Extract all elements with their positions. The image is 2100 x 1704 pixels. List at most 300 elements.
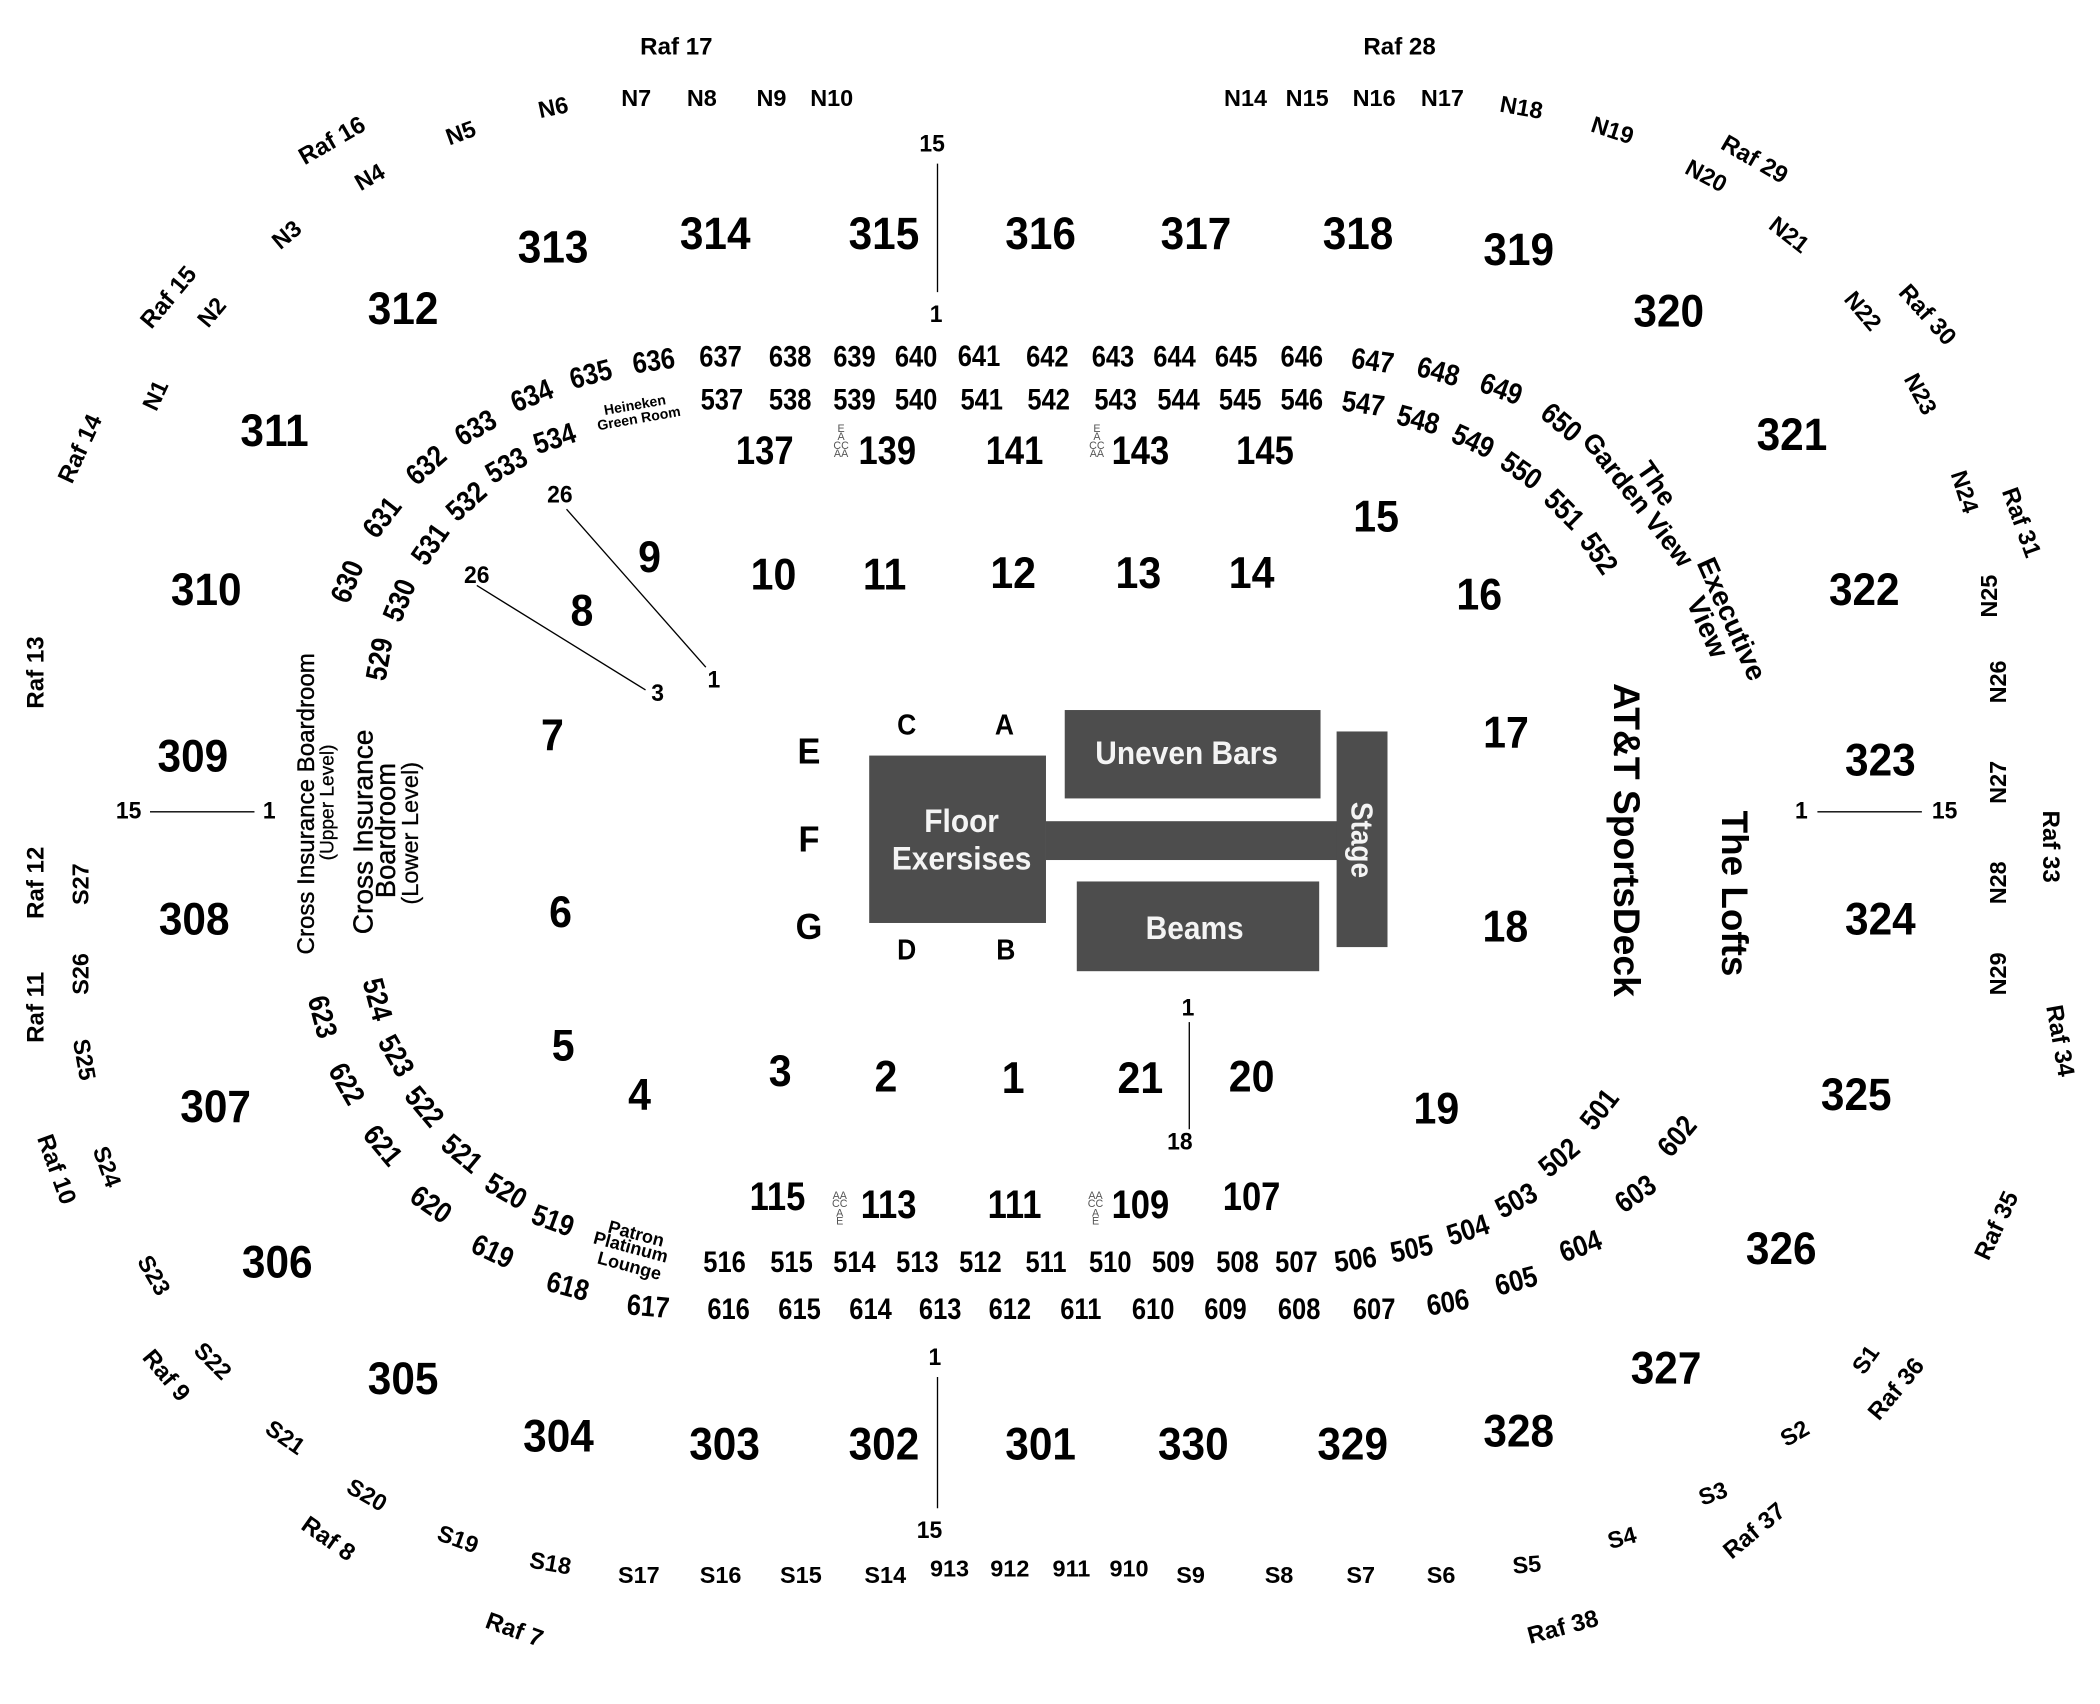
600 level top arc: 640 <box>895 340 937 373</box>
Patron Platinum Lounge label: Lounge <box>595 1248 664 1284</box>
rafter sections: Raf 36 <box>1863 1353 1930 1425</box>
north suites <box>137 85 2011 995</box>
south suites: S20 <box>342 1473 392 1517</box>
north suites: N29 <box>1985 952 2011 995</box>
north suites: N22 <box>1839 286 1887 336</box>
600 level bottom arc: 603 <box>1608 1168 1662 1219</box>
panel: stage <box>1337 731 1388 947</box>
600 level bottom arc: 615 <box>778 1292 821 1325</box>
Cross Insurance Boardroom lower level: (Lower Level) <box>397 762 423 905</box>
500 level bottom arc: 514 <box>833 1245 876 1278</box>
stage labels: Beams <box>1146 910 1244 946</box>
500 level bottom arc: 504 <box>1443 1207 1494 1252</box>
rafter sections: Raf 8 <box>296 1511 360 1567</box>
The Garden View label: The <box>1631 456 1683 512</box>
south suites: S9 <box>1176 1562 1205 1588</box>
lower bowl 100 sections: 115 <box>750 1174 805 1219</box>
floor level sections 1 to 21: 20 <box>1229 1052 1274 1102</box>
row guide numbers: 1 <box>928 1344 941 1370</box>
stage labels: Floor <box>924 803 999 839</box>
south suites <box>67 863 1884 1588</box>
600 level top arc: 643 <box>1092 340 1134 373</box>
500 level bottom arc: 520 <box>480 1166 533 1216</box>
floor section letters: G <box>796 907 822 947</box>
600 level top arc: 630 <box>324 556 370 607</box>
north suites: N18 <box>1498 91 1545 124</box>
north suites: N25 <box>1976 575 2002 618</box>
floor stage diagram <box>869 710 1388 971</box>
500 level top arc: 531 <box>404 517 456 571</box>
upper level 300 sections: 319 <box>1483 225 1554 275</box>
500 level bottom arc: 502 <box>1532 1131 1586 1184</box>
accessible seating row stacks: CC <box>833 440 849 452</box>
south suites: S25 <box>68 1037 101 1082</box>
upper level 300 sections: 312 <box>368 284 438 334</box>
lower bowl 100 sections: 141 <box>986 428 1043 473</box>
500 level top arc: 548 <box>1393 398 1443 441</box>
rafter sections: Raf 12 <box>23 847 50 919</box>
row guide numbers: 15 <box>116 797 141 824</box>
500 level top arc: 544 <box>1157 383 1200 416</box>
accessible seating row stacks: AA <box>834 448 849 460</box>
south suites: S24 <box>88 1143 126 1191</box>
accessible seating row stacks: E <box>838 423 845 435</box>
floor level sections 1 to 21: 18 <box>1483 902 1528 952</box>
600 level top arc: 632 <box>399 438 453 491</box>
panel: beams <box>1077 881 1319 971</box>
floor level sections 1 to 21: 14 <box>1229 549 1275 598</box>
600 level bottom arc: 607 <box>1353 1292 1395 1325</box>
500 level bottom arc: 513 <box>896 1245 939 1278</box>
500 level top arc: 552 <box>1573 526 1625 580</box>
500 level bottom arc <box>356 975 1625 1279</box>
stage labels: Stage <box>1344 802 1377 878</box>
500 level top arc: 539 <box>833 383 876 416</box>
600 level bottom arc: 620 <box>404 1178 458 1230</box>
accessible seating row stacks: CC <box>832 1198 848 1210</box>
upper level 300 sections: 302 <box>849 1419 919 1470</box>
upper level 300 sections: 306 <box>242 1237 313 1288</box>
rafter sections: Raf 7 <box>482 1607 547 1653</box>
500 level top arc: 542 <box>1027 383 1070 416</box>
accessible seating row stacks: E <box>1093 423 1100 435</box>
lower bowl 100 sections: 139 <box>858 428 916 473</box>
500 level bottom arc: 507 <box>1275 1245 1318 1278</box>
floor section letters: C <box>897 709 916 741</box>
south suites: S14 <box>864 1562 906 1588</box>
upper level 300 sections: 328 <box>1483 1406 1554 1457</box>
rafter sections: Raf 38 <box>1525 1605 1601 1650</box>
500 level bottom arc: 509 <box>1152 1245 1194 1278</box>
row guide numbers: 15 <box>919 130 945 157</box>
upper level 300 sections: 310 <box>171 565 242 616</box>
north suites: N4 <box>350 158 389 196</box>
floor level sections 1 to 21: 15 <box>1353 492 1399 542</box>
Cross Insurance Boardroom upper level: (Upper Level) <box>318 744 339 860</box>
north suites: N24 <box>1946 467 1984 516</box>
500 level top arc: 543 <box>1094 383 1137 416</box>
row guide numbers: 1 <box>930 300 943 327</box>
north suites: N10 <box>810 85 853 111</box>
600 level bottom arc: 621 <box>357 1118 409 1172</box>
lower bowl 100 sections: 143 <box>1112 428 1169 473</box>
row guide numbers: 1 <box>263 797 276 824</box>
north suites: N5 <box>442 115 479 150</box>
north suites: N6 <box>536 92 570 123</box>
upper level 300 sections: 308 <box>159 894 230 945</box>
floor level sections 1 to 21: 12 <box>990 549 1036 598</box>
north suites: N8 <box>687 85 717 111</box>
south suites: S6 <box>1427 1562 1455 1588</box>
north suites: N14 <box>1224 85 1267 111</box>
lower bowl 100 sections: 145 <box>1236 428 1294 473</box>
floor level sections 1 to 21: 16 <box>1456 570 1502 620</box>
600 level bottom arc: 602 <box>1650 1109 1703 1163</box>
500 level bottom arc: 501 <box>1573 1082 1625 1136</box>
floor level sections 1 to 21: 4 <box>628 1071 651 1121</box>
floor section letters: B <box>996 934 1015 966</box>
600 level top arc <box>324 339 1589 607</box>
500 level bottom arc: 524 <box>356 975 399 1025</box>
500 level top arc: 551 <box>1538 482 1591 536</box>
600 level bottom arc: 606 <box>1424 1282 1472 1322</box>
rafter sections: Raf 10 <box>31 1131 81 1208</box>
floor level sections 1 to 21: 6 <box>549 887 572 937</box>
upper level 300 sections: 305 <box>368 1354 438 1404</box>
500 level bottom arc: 503 <box>1490 1176 1543 1225</box>
south suites: S17 <box>618 1562 660 1588</box>
500 level top arc: 545 <box>1219 383 1261 416</box>
upper level 300 sections: 330 <box>1158 1419 1229 1470</box>
500 level top arc: 530 <box>376 574 422 626</box>
500 level bottom arc: 511 <box>1025 1245 1067 1278</box>
south suites: S19 <box>434 1520 482 1558</box>
rafter sections: Raf 34 <box>2040 1003 2079 1079</box>
south suites: S26 <box>67 953 93 995</box>
500 level bottom arc: 508 <box>1216 1245 1259 1278</box>
floor section letters <box>796 709 1015 966</box>
600 level top arc: 650 <box>1535 396 1589 448</box>
Executive View label: View <box>1681 592 1735 662</box>
panel: uneven bars <box>1065 710 1321 798</box>
upper level 300 sections: 316 <box>1005 209 1076 259</box>
north suites: N21 <box>1764 211 1814 258</box>
floor level sections 1 to 21: 21 <box>1118 1053 1163 1103</box>
north suites: N1 <box>137 376 173 414</box>
600 level bottom arc: 611 <box>1060 1292 1101 1325</box>
rafter sections: Raf 28 <box>1363 34 1436 61</box>
upper level 300 sections: 326 <box>1746 1224 1817 1274</box>
500 level top arc: 549 <box>1447 417 1499 465</box>
Patron Platinum Lounge label: Platinum <box>591 1228 670 1267</box>
accessible seating row stacks: AA <box>1088 1190 1104 1202</box>
north suites: N20 <box>1681 154 1731 197</box>
south suites: S2 <box>1776 1415 1814 1452</box>
row guide numbers: 15 <box>917 1516 942 1543</box>
floor level sections 1 to 21: 13 <box>1116 549 1161 598</box>
upper level 300 sections: 329 <box>1317 1419 1388 1470</box>
600 level top arc: 647 <box>1349 341 1396 380</box>
600 level bottom arc: 619 <box>467 1227 519 1275</box>
lower bowl 100 sections: 113 <box>861 1182 916 1227</box>
north suites: N17 <box>1421 85 1464 111</box>
accessible seating row stacks: A <box>836 1208 844 1220</box>
south suites: 911 <box>1053 1556 1090 1582</box>
600 level bottom arc: 617 <box>626 1288 671 1324</box>
600 level bottom arc <box>301 992 1703 1325</box>
600 level bottom arc: 608 <box>1278 1292 1320 1325</box>
south suites: S5 <box>1511 1550 1542 1579</box>
600 level top arc: 645 <box>1215 340 1257 373</box>
600 level top arc: 646 <box>1281 340 1323 373</box>
Heineken Green Room label: Heineken <box>603 391 667 418</box>
500 level top arc: 538 <box>769 383 811 416</box>
600 level top arc: 642 <box>1026 340 1069 373</box>
500 level bottom arc: 510 <box>1089 1245 1132 1278</box>
600 level bottom arc: 616 <box>707 1292 750 1325</box>
500 level bottom arc: 505 <box>1387 1228 1436 1269</box>
500 level bottom arc: 516 <box>703 1245 746 1278</box>
accessible seating row stacks <box>832 423 1105 1228</box>
row guide numbers: 3 <box>651 679 664 706</box>
600 level bottom arc: 604 <box>1555 1223 1607 1269</box>
floor level sections 1 to 21: 10 <box>751 550 796 600</box>
upper level 300 sections: 317 <box>1161 209 1231 259</box>
500 level top arc: 537 <box>701 383 743 416</box>
rafter sections: Raf 16 <box>294 111 370 171</box>
stage labels <box>892 735 1377 946</box>
south suites: S21 <box>261 1415 310 1460</box>
upper level 300 sections: 320 <box>1633 286 1704 337</box>
600 level bottom arc: 623 <box>301 992 344 1042</box>
north suites: N3 <box>267 215 306 254</box>
row guide lines <box>150 164 1922 1508</box>
floor level sections 1 to 21: 1 <box>1002 1053 1025 1103</box>
accessible seating row stacks: E <box>836 1216 843 1228</box>
lower bowl 100 sections: 109 <box>1112 1182 1169 1227</box>
north suites: N23 <box>1899 369 1942 419</box>
floor level sections 1 to 21: 9 <box>638 533 661 582</box>
south suites: S1 <box>1847 1340 1884 1379</box>
upper level 300 sections: 309 <box>158 731 228 782</box>
500 level bottom arc: 519 <box>527 1197 579 1243</box>
south suites: S16 <box>700 1562 741 1588</box>
row guide numbers: 1 <box>1795 797 1808 824</box>
Patron Platinum Lounge label: Patron <box>606 1217 666 1251</box>
lower bowl 100 sections: 137 <box>736 428 794 473</box>
500 level bottom arc: 522 <box>398 1080 451 1133</box>
upper level 300 sections: 313 <box>518 222 588 273</box>
accessible seating row stacks: CC <box>1089 440 1105 452</box>
600 level top arc: 649 <box>1476 366 1527 411</box>
The Garden View label: Garden View <box>1576 427 1700 573</box>
accessible seating row stacks: CC <box>1088 1198 1104 1210</box>
row guide numbers: 26 <box>547 481 573 508</box>
floor level sections 1 to 21: 11 <box>863 550 906 600</box>
upper level 300 sections: 324 <box>1845 894 1916 945</box>
floor section letters: E <box>797 732 820 772</box>
upper level 300 sections: 318 <box>1323 209 1393 259</box>
500 level top arc: 532 <box>439 475 493 528</box>
south suites: 913 <box>930 1556 969 1582</box>
500 level bottom arc: 506 <box>1332 1240 1379 1279</box>
south suites: S15 <box>780 1562 822 1588</box>
stage labels: Uneven Bars <box>1095 735 1278 771</box>
600 level top arc: 631 <box>356 490 408 544</box>
row guide numbers: 18 <box>1167 1128 1193 1155</box>
south suites: S8 <box>1265 1562 1293 1588</box>
north suites: N15 <box>1286 85 1329 111</box>
upper level 300 sections: 321 <box>1757 409 1827 460</box>
Cross Insurance Boardroom upper level <box>293 653 339 954</box>
row guide numbers: 15 <box>1932 797 1957 824</box>
south suites: S22 <box>189 1337 237 1385</box>
600 level top arc: 634 <box>506 372 558 419</box>
Cross Insurance Boardroom lower level <box>347 730 423 934</box>
connecting runway <box>1046 821 1338 860</box>
north suites: N7 <box>621 85 651 111</box>
floor section letters: F <box>798 820 819 860</box>
600 level bottom arc: 622 <box>322 1057 372 1110</box>
upper level 300 sections: 322 <box>1829 565 1900 616</box>
floor level sections 1 to 21: 7 <box>541 711 564 760</box>
rafter sections: Raf 37 <box>1718 1497 1791 1565</box>
south suites: S3 <box>1695 1476 1731 1511</box>
500 level bottom arc: 523 <box>371 1029 421 1082</box>
500 level top arc: 540 <box>895 383 937 416</box>
500 level top arc: 529 <box>359 635 399 683</box>
rafter sections: Raf 17 <box>640 34 713 61</box>
Heineken Green Room label: Green Room <box>596 403 682 433</box>
rafter sections: Raf 33 <box>2037 810 2064 883</box>
row guide numbers: 1 <box>707 666 720 693</box>
upper level 300 sections: 303 <box>689 1419 760 1470</box>
row guide numbers: 1 <box>1182 994 1194 1021</box>
500 level top arc: 550 <box>1495 445 1548 496</box>
Cross Insurance Boardroom lower level: Boardroom <box>370 763 401 898</box>
upper level 300 sections <box>158 209 1916 1470</box>
south suites: S27 <box>67 863 93 905</box>
upper level 300 sections: 315 <box>849 209 919 259</box>
lower bowl 100 sections: 111 <box>988 1182 1041 1227</box>
600 level bottom arc: 609 <box>1204 1292 1247 1325</box>
500 level top arc <box>359 383 1625 683</box>
500 level bottom arc: 512 <box>959 1245 1002 1278</box>
floor level sections 1 to 21: 5 <box>552 1021 575 1071</box>
rafter sections: Raf 14 <box>53 410 108 487</box>
panel: floor exercises <box>869 756 1046 923</box>
accessible seating row stacks: A <box>838 431 846 443</box>
upper level 300 sections: 307 <box>180 1082 251 1133</box>
floor level sections 1 to 21: 19 <box>1414 1084 1459 1134</box>
upper level 300 sections: 314 <box>680 209 751 259</box>
600 level top arc: 644 <box>1153 340 1196 373</box>
north suites: N19 <box>1588 111 1637 149</box>
600 level top arc: 639 <box>833 340 876 373</box>
side venue: AT&T SportsDeck: AT&T SportsDeck <box>1606 683 1648 997</box>
north suites: N26 <box>1985 660 2011 703</box>
floor level sections 1 to 21: 3 <box>769 1047 792 1096</box>
north suites: N27 <box>1985 761 2011 804</box>
north suites: N2 <box>192 292 231 332</box>
accessible seating row stacks: AA <box>833 1190 848 1202</box>
stage labels: Exersises <box>892 841 1031 877</box>
floor level sections 1 to 21: 17 <box>1483 708 1529 758</box>
floor section letters: A <box>995 709 1014 741</box>
rafter sections: Raf 30 <box>1893 279 1961 351</box>
upper level 300 sections: 327 <box>1631 1343 1701 1394</box>
Patron Platinum Lounge label <box>591 1217 670 1284</box>
lower bowl 100 sections <box>736 428 1294 1227</box>
accessible seating row stacks: A <box>1092 1208 1100 1220</box>
600 level bottom arc: 612 <box>989 1292 1031 1325</box>
rafter sections: Raf 15 <box>135 261 202 334</box>
north suites: N9 <box>756 85 786 111</box>
500 level top arc: 533 <box>480 440 533 490</box>
600 level top arc: 638 <box>769 340 811 373</box>
Cross Insurance Boardroom lower level: Cross Insurance <box>347 730 378 934</box>
floor section letters: D <box>897 934 916 966</box>
600 level top arc: 641 <box>958 339 1000 372</box>
rafter sections: Raf 13 <box>23 636 50 709</box>
600 level bottom arc: 610 <box>1132 1292 1174 1325</box>
accessible seating row stacks: E <box>1092 1216 1099 1228</box>
lower bowl 100 sections: 107 <box>1223 1174 1280 1219</box>
600 level top arc: 635 <box>566 352 615 395</box>
upper level 300 sections: 323 <box>1845 735 1916 786</box>
600 level top arc: 636 <box>630 341 677 380</box>
south suites: 910 <box>1109 1556 1149 1582</box>
rafter sections: Raf 35 <box>1969 1187 2024 1264</box>
500 level top arc: 534 <box>529 416 580 460</box>
row guide numbers: 26 <box>464 561 490 588</box>
upper level 300 sections: 304 <box>523 1411 594 1462</box>
floor level sections 1 to 21: 2 <box>875 1052 897 1102</box>
side venue: The Lofts: The Lofts <box>1714 811 1755 976</box>
600 level bottom arc: 613 <box>919 1292 961 1325</box>
upper level 300 sections: 311 <box>240 405 309 456</box>
south suites: S4 <box>1605 1521 1639 1554</box>
500 level top arc: 547 <box>1340 384 1387 423</box>
Executive View label: Executive <box>1691 553 1773 685</box>
rafter sections: Raf 11 <box>23 972 50 1043</box>
accessible seating row stacks: A <box>1093 431 1101 443</box>
rafter sections: Raf 29 <box>1716 130 1793 189</box>
south suites: S23 <box>132 1251 176 1300</box>
floor level sections 1 to 21 <box>541 492 1529 1134</box>
rafter sections: Raf 9 <box>137 1344 195 1407</box>
Cross Insurance Boardroom upper level: Cross Insurance Boardroom <box>293 653 320 954</box>
south suites: 912 <box>990 1556 1029 1582</box>
600 level bottom arc: 605 <box>1491 1259 1541 1302</box>
600 level top arc: 648 <box>1414 350 1463 393</box>
600 level bottom arc: 614 <box>849 1292 892 1325</box>
500 level bottom arc: 521 <box>435 1127 489 1180</box>
500 level top arc: 546 <box>1281 383 1323 416</box>
south suites: S18 <box>528 1547 573 1580</box>
600 level bottom arc: 618 <box>543 1264 593 1307</box>
500 level bottom arc: 515 <box>770 1245 813 1278</box>
south suites: S7 <box>1346 1562 1375 1588</box>
floor level sections 1 to 21: 8 <box>570 586 593 636</box>
rafter sections: Raf 31 <box>1996 484 2046 561</box>
upper level 300 sections: 325 <box>1821 1070 1892 1120</box>
north suites: N16 <box>1353 85 1396 111</box>
600 level top arc: 637 <box>699 340 742 373</box>
north suites: N28 <box>1985 861 2011 904</box>
500 level top arc: 541 <box>960 383 1003 416</box>
row guide numbers <box>116 130 1957 1543</box>
